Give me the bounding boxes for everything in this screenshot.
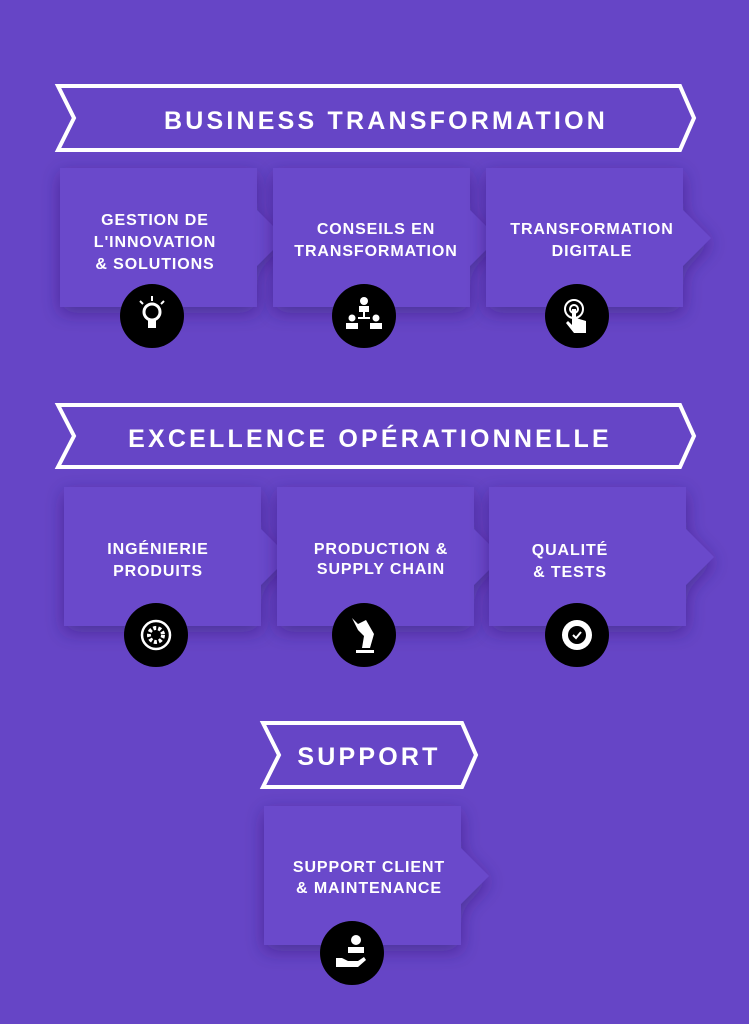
card: production & supply chain: PRODUCTION & — [314, 541, 448, 558]
banner: support — [263, 723, 476, 787]
card: transformation digitale: DIGITALE — [552, 243, 632, 260]
banner: excellence operationnelle — [58, 405, 694, 467]
card: ingenierie produits — [64, 487, 289, 667]
card: ingenierie produits: PRODUITS — [113, 563, 203, 580]
card: conseils en transformation: TRANSFORMATION — [294, 243, 458, 260]
banner: support: SUPPORT — [297, 743, 441, 771]
card: qualite & tests: QUALITÉ — [532, 540, 608, 559]
card: ingenierie produits: INGÉNIERIE — [107, 539, 209, 558]
card: gestion de l'innovation: L'INNOVATION — [94, 234, 216, 251]
card: support client & maintenance — [264, 806, 489, 985]
banner: business transformation — [58, 86, 694, 150]
card: support client & maintenance: & MAINTENANCE — [296, 880, 442, 897]
card: transformation digitale: TRANSFORMATION — [510, 221, 674, 238]
icon: org chart — [332, 284, 396, 348]
banner: business transformation: BUSINESS TRANSFORMATION — [164, 107, 608, 135]
icon: gear cycle — [124, 603, 188, 667]
card: conseils en transformation: CONSEILS EN — [317, 221, 435, 238]
icon: quality badge — [545, 603, 609, 667]
card: gestion de l'innovation: GESTION DE — [101, 212, 209, 229]
card: qualite & tests — [489, 487, 714, 667]
card: support client & maintenance: SUPPORT CLIENT — [293, 859, 445, 876]
card: conseils en transformation — [273, 168, 498, 348]
icon: robot arm — [332, 603, 396, 667]
card: gestion de l'innovation: & SOLUTIONS — [95, 256, 215, 273]
card: gestion de l'innovation — [60, 168, 285, 348]
icon: lightbulb — [120, 284, 184, 348]
card: qualite & tests: & TESTS — [533, 564, 607, 581]
card: production & supply chain: SUPPLY CHAIN — [317, 561, 445, 578]
card: production & supply chain — [277, 487, 502, 667]
icon: touch — [545, 284, 609, 348]
banner: excellence operationnelle: EXCELLENCE OPÉRATIONNELLE — [128, 424, 612, 453]
card: transformation digitale — [486, 168, 711, 348]
icon: support hand — [320, 921, 384, 985]
